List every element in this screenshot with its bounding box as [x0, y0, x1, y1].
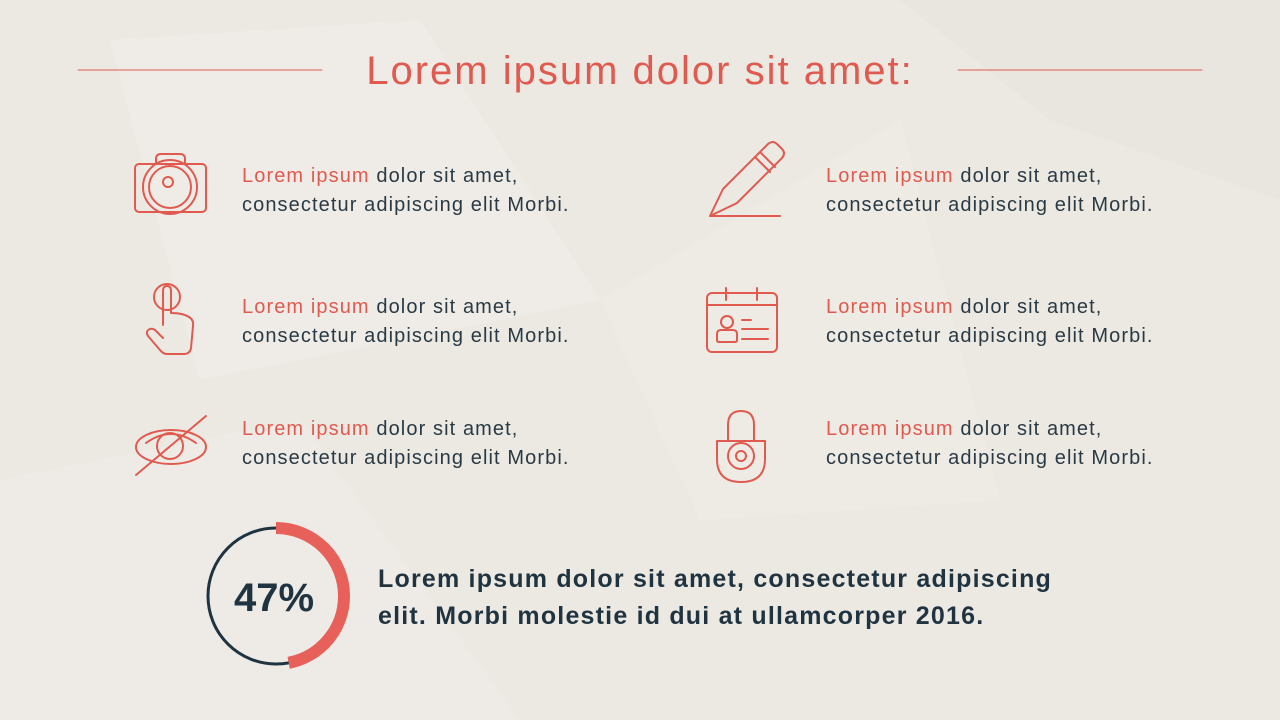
icon: id calendar — [707, 288, 777, 352]
icon: finger — [147, 284, 193, 354]
text: item 6: Lorem ipsum dolor sit amet, — [826, 418, 1102, 440]
icon: lock — [717, 411, 765, 482]
summary text: elit. Morbi molestie id dui at ullamcorper 2016. — [378, 602, 984, 630]
text: item 3: Lorem ipsum dolor sit amet, — [242, 296, 518, 318]
text: item 3 — [242, 296, 570, 347]
icon: eye — [136, 416, 206, 475]
text: item 6 — [826, 418, 1154, 469]
donut chart: 47% — [234, 576, 314, 620]
title: Lorem ipsum dolor sit amet: — [366, 49, 914, 93]
icon: pencil — [710, 142, 784, 216]
text: item 4: Lorem ipsum dolor sit amet, — [826, 296, 1102, 318]
text: item 3: consectetur adipiscing elit Morbi. — [242, 325, 570, 347]
text: item 5: Lorem ipsum dolor sit amet, — [242, 418, 518, 440]
summary text: Lorem ipsum dolor sit amet, consectetur adipiscing — [378, 565, 1052, 593]
text: item 5: consectetur adipiscing elit Morbi. — [242, 447, 570, 469]
text: item 5 — [242, 418, 570, 469]
text: item 1: consectetur adipiscing elit Morbi. — [242, 194, 570, 216]
donut chart — [206, 522, 350, 669]
text: item 1: Lorem ipsum dolor sit amet, — [242, 165, 518, 187]
text: item 4: consectetur adipiscing elit Morbi. — [826, 325, 1154, 347]
summary text — [378, 565, 1052, 630]
text: item 2: consectetur adipiscing elit Morbi. — [826, 194, 1154, 216]
text: item 2 — [826, 165, 1154, 216]
icon: camera — [135, 154, 206, 214]
text: item 1 — [242, 165, 570, 216]
text: item 4 — [826, 296, 1154, 347]
text: item 2: Lorem ipsum dolor sit amet, — [826, 165, 1102, 187]
text: item 6: consectetur adipiscing elit Morbi. — [826, 447, 1154, 469]
